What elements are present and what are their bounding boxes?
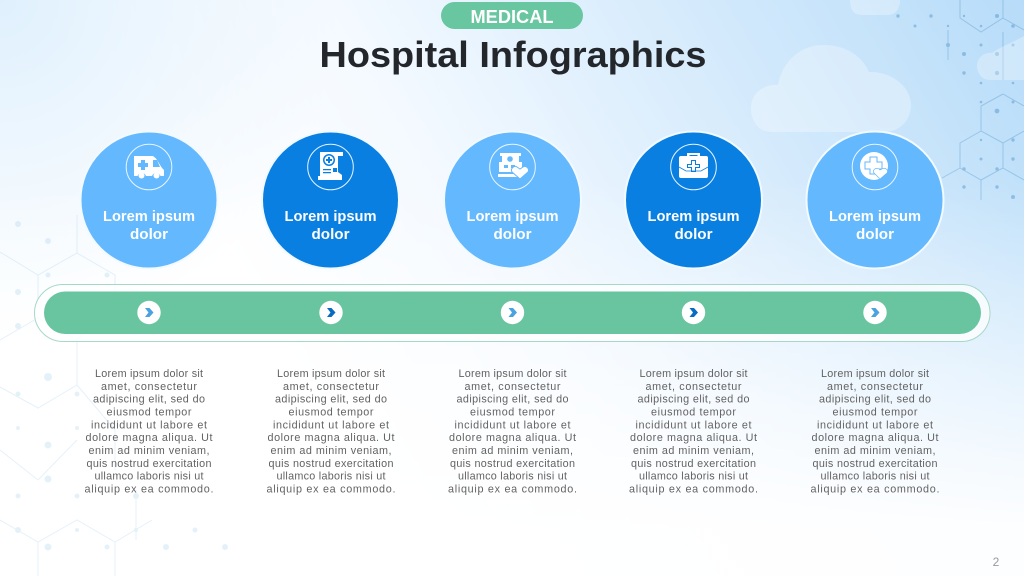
icon: medical scroll xyxy=(318,152,343,180)
text block 5: eiusmod tempor xyxy=(832,406,918,418)
text block 4: adipiscing elit, sed do xyxy=(638,394,750,406)
text block 4: amet, consectetur xyxy=(646,381,742,393)
text block 1: dolore magna aliqua. Ut xyxy=(86,432,212,444)
text block 4: incididunt ut labore et xyxy=(636,419,752,431)
text block 2: incididunt ut labore et xyxy=(273,419,389,431)
step 2 circle: dolor xyxy=(312,226,350,243)
text block 2: Lorem ipsum dolor sit xyxy=(277,368,385,380)
text block 2: amet, consectetur xyxy=(283,381,379,393)
text block 2: eiusmod tempor xyxy=(288,406,374,418)
text block 1: adipiscing elit, sed do xyxy=(93,394,205,406)
text block 3: ullamco laboris nisi ut xyxy=(458,471,567,483)
text block 2: dolore magna aliqua. Ut xyxy=(268,432,394,444)
arrow marker 2 xyxy=(319,301,343,324)
arrow marker 4 xyxy=(682,301,705,324)
text block 1: incididunt ut labore et xyxy=(91,419,207,431)
text block 2 xyxy=(266,368,396,496)
text block 1: ullamco laboris nisi ut xyxy=(94,471,204,483)
text block 1: aliquip ex ea commodo. xyxy=(84,484,214,496)
step 1 circle: Lorem ipsum xyxy=(103,208,195,225)
text block 2: adipiscing elit, sed do xyxy=(275,394,387,406)
text block 1 xyxy=(84,368,214,496)
text block 3: enim ad minim veniam, xyxy=(452,445,573,457)
background: clouds xyxy=(751,0,1024,132)
step 1 circle: dolor xyxy=(130,226,168,243)
text block 5: Lorem ipsum dolor sit xyxy=(821,368,929,380)
text block 5: adipiscing elit, sed do xyxy=(819,394,931,406)
text block 5: enim ad minim veniam, xyxy=(814,445,936,457)
text block 3: Lorem ipsum dolor sit xyxy=(458,368,566,380)
text block 4: aliquip ex ea commodo. xyxy=(629,484,758,496)
text block 2: quis nostrud exercitation xyxy=(268,458,394,470)
icon: ambulance xyxy=(134,156,164,178)
step 5 circle xyxy=(806,132,944,268)
text block 1: eiusmod tempor xyxy=(106,406,192,418)
page number: 2 xyxy=(993,555,1000,569)
icon: first aid kit xyxy=(679,153,708,178)
background: left hexagon pattern xyxy=(0,215,228,576)
text block 3 xyxy=(448,368,577,496)
text block 3: dolore magna aliqua. Ut xyxy=(449,432,576,444)
text block 1: enim ad minim veniam, xyxy=(88,445,210,457)
step 2 circle: Lorem ipsum xyxy=(284,208,376,225)
icon: medical cross with heart xyxy=(860,152,888,180)
background: top right hexagon pattern xyxy=(896,0,1024,200)
timeline bar xyxy=(34,284,990,342)
text block 1: amet, consectetur xyxy=(101,381,197,393)
step 4 circle: dolor xyxy=(674,226,713,243)
text block 4: eiusmod tempor xyxy=(651,406,736,418)
text block 4 xyxy=(629,368,758,496)
text block 5: incididunt ut labore et xyxy=(817,419,933,431)
text block 4: enim ad minim veniam, xyxy=(633,445,754,457)
arrow marker 1 xyxy=(137,301,161,324)
text block 3: eiusmod tempor xyxy=(470,406,555,418)
text block 3: incididunt ut labore et xyxy=(454,419,570,431)
text block 5: amet, consectetur xyxy=(827,381,923,393)
text block 1: quis nostrud exercitation xyxy=(86,458,212,470)
text block 4: quis nostrud exercitation xyxy=(631,458,756,470)
text block 5: aliquip ex ea commodo. xyxy=(810,484,940,496)
text block 5 xyxy=(810,368,940,496)
step 4 circle xyxy=(625,132,762,268)
text block 5: ullamco laboris nisi ut xyxy=(820,471,930,483)
title: Hospital Infographics xyxy=(320,34,706,75)
text block 4: Lorem ipsum dolor sit xyxy=(640,368,748,380)
arrow marker 3 xyxy=(501,301,524,324)
text block 5: quis nostrud exercitation xyxy=(812,458,938,470)
arrow marker 5 xyxy=(863,301,887,324)
text block 2: aliquip ex ea commodo. xyxy=(266,484,396,496)
step 1 circle xyxy=(80,132,218,268)
step 4 circle: Lorem ipsum xyxy=(648,208,740,225)
step 3 circle xyxy=(444,132,581,268)
step 2 circle xyxy=(262,132,399,268)
badge: MEDICAL: MEDICAL xyxy=(470,6,554,27)
text block 5: dolore magna aliqua. Ut xyxy=(812,432,938,444)
step 5 circle: dolor xyxy=(856,226,894,243)
text block 3: amet, consectetur xyxy=(464,381,561,393)
step 3 circle: dolor xyxy=(494,226,532,243)
badge: MEDICAL xyxy=(441,2,583,29)
icon: hospital with heart xyxy=(498,153,529,179)
text block 3: adipiscing elit, sed do xyxy=(456,394,568,406)
text block 4: ullamco laboris nisi ut xyxy=(639,471,748,483)
text block 4: dolore magna aliqua. Ut xyxy=(630,432,757,444)
text block 3: quis nostrud exercitation xyxy=(450,458,575,470)
step 3 circle: Lorem ipsum xyxy=(466,208,558,225)
step 5 circle: Lorem ipsum xyxy=(829,208,921,225)
text block 2: enim ad minim veniam, xyxy=(270,445,392,457)
text block 2: ullamco laboris nisi ut xyxy=(276,471,386,483)
text block 1: Lorem ipsum dolor sit xyxy=(95,368,203,380)
text block 3: aliquip ex ea commodo. xyxy=(448,484,577,496)
